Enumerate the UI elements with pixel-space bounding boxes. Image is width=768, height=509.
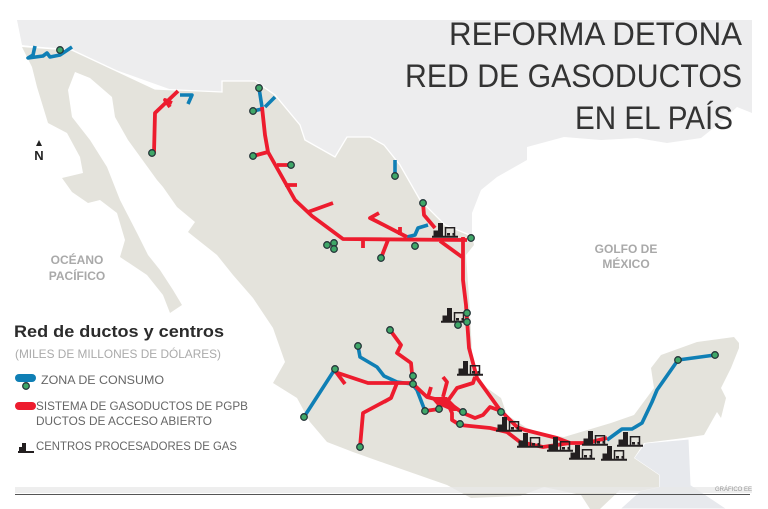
legend item: pipeline system: DUCTOS DE ACCESO ABIERTO: [36, 416, 212, 428]
legend heading: Red de ductos y centros: [14, 322, 224, 341]
label: Pacific Ocean: OCÉANO: [51, 253, 103, 267]
label: Gulf of Mexico: GOLFO DE: [595, 242, 657, 256]
credit: GRÁFICO EE: [715, 486, 752, 493]
label: Gulf of Mexico: MÉXICO: [602, 256, 650, 271]
legend item: consumption zone: ZONA DE CONSUMO: [41, 375, 164, 387]
consumption points: [57, 47, 718, 450]
title: RED DE GASODUCTOS: [405, 58, 742, 94]
legend subtitle: (MILES DE MILLONES DE DÓLARES): [15, 346, 221, 361]
map: US border line: [22, 46, 472, 236]
legend item: processing centres: CENTROS PROCESADORES DE GAS: [36, 441, 237, 453]
icon: north arrow: [34, 140, 44, 163]
map: United States landmass: [17, 20, 752, 240]
title: [405, 16, 743, 136]
red gas pipeline network: [154, 91, 607, 447]
blue consumption-zone pipelines: [28, 46, 715, 440]
legend item: pipeline system: SISTEMA DE GASODUCTOS DE PGPB: [36, 401, 248, 413]
label: Pacific Ocean: PACÍFICO: [49, 268, 105, 283]
footer band: [15, 487, 752, 493]
gas processing plants: [432, 223, 643, 461]
legend item: pipeline system: [15, 401, 248, 428]
icon: north arrow: N: [34, 148, 44, 163]
title: EN EL PAÍS: [575, 100, 733, 136]
title: REFORMA DETONA: [449, 16, 743, 52]
footer rule: [15, 494, 750, 495]
legend item: consumption zone: [15, 374, 164, 389]
legend: [14, 322, 248, 453]
map: Guatemala and Belize: [620, 439, 727, 509]
